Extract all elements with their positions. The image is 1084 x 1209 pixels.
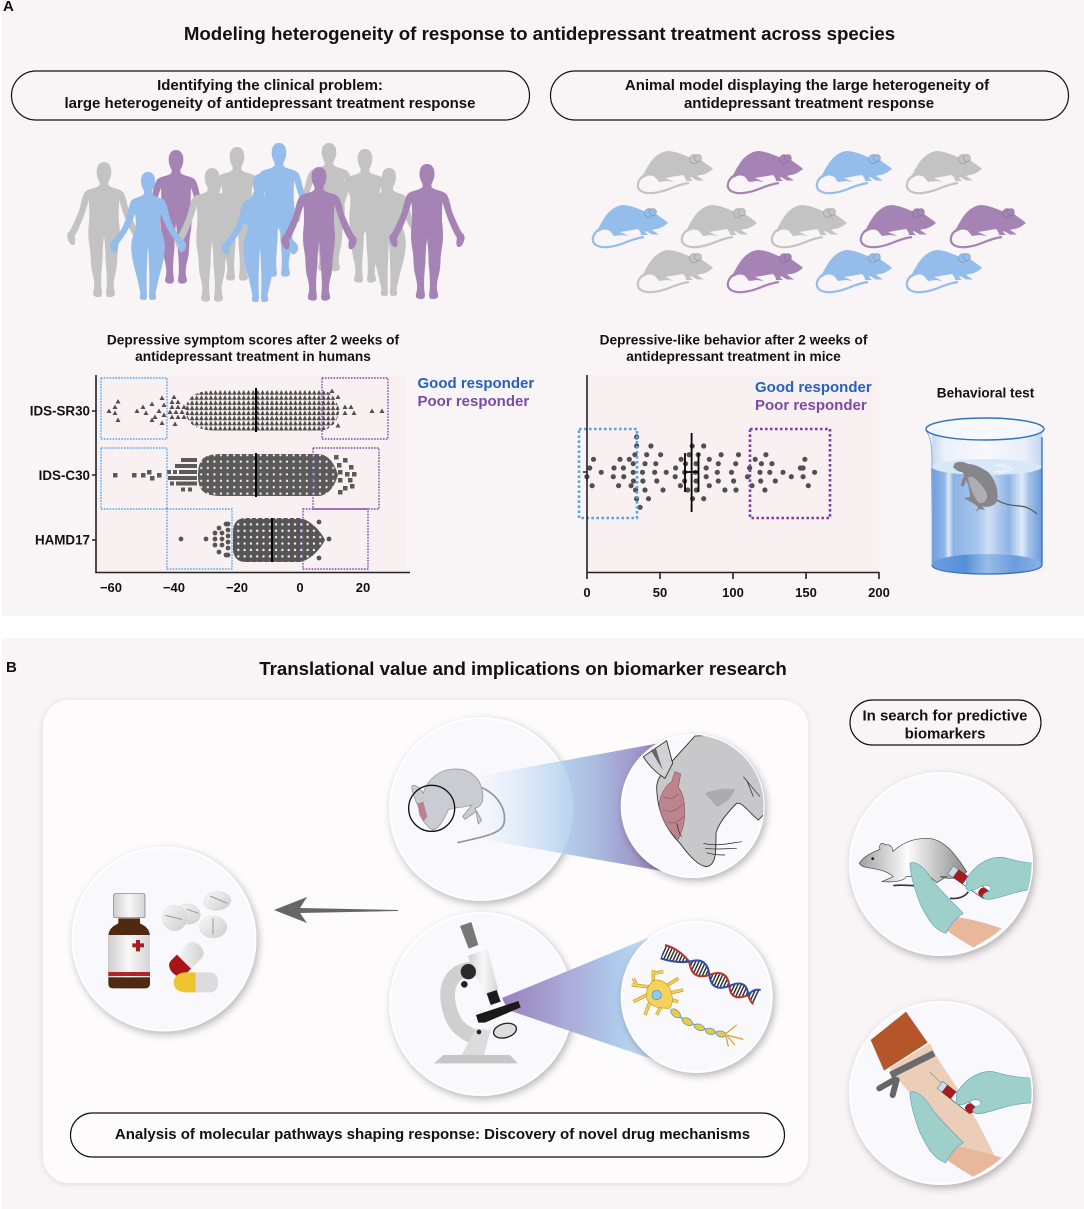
circle: microscope <box>390 913 572 1095</box>
pill: animal model: Animal model displaying the large heterogeneity of <box>625 77 990 94</box>
poor responder box <box>750 429 830 518</box>
poor responder boxes <box>303 378 388 569</box>
swarm IDS-SR30 <box>106 388 384 433</box>
icon: neuron <box>632 970 743 1047</box>
heading: behavioral test: Behavioral test <box>937 386 1035 400</box>
row labels: IDS-C30 <box>39 468 90 483</box>
chart: human swarm plot <box>30 375 410 595</box>
legend: mouse chart: Poor responder <box>755 397 867 414</box>
legend: mouse chart <box>755 379 872 414</box>
main title panel B: Translational value and implications on biomarker research <box>259 658 787 679</box>
icon: microscope <box>434 922 521 1063</box>
pill: predictive biomarkers <box>850 700 1041 745</box>
circle: drugs <box>72 848 256 1030</box>
legend: human chart <box>418 375 534 410</box>
x axis labels: −40 <box>163 580 185 595</box>
x axis labels: 150 <box>795 585 817 600</box>
chart: mouse swarm plot <box>579 375 890 600</box>
pill: animal model: antidepressant treatment response <box>684 95 934 112</box>
x axis labels <box>100 580 370 595</box>
pill: predictive biomarkers: biomarkers <box>905 726 985 742</box>
heading: mouse chart: Depressive-like behavior after 2 weeks of <box>600 332 868 348</box>
swarm IDS-C30 <box>113 452 356 498</box>
dots <box>587 437 815 507</box>
circle: mouse blood sampling <box>850 773 1047 955</box>
circle: mouse whole body <box>390 718 572 900</box>
x axis labels: 0 <box>296 580 304 595</box>
circle: human blood sampling <box>850 1002 1037 1184</box>
x axis labels: −20 <box>226 580 248 595</box>
panel: translational white card <box>43 700 808 1183</box>
legend: human chart: Poor responder <box>418 393 529 410</box>
good responder boxes <box>101 378 232 569</box>
legend: mouse chart: Good responder <box>755 379 872 396</box>
circle sheen over beam <box>480 762 573 854</box>
pill: clinical problem <box>12 71 530 120</box>
panel B background <box>2 638 1084 1209</box>
row labels: HAMD17 <box>35 532 90 548</box>
icon: DNA helix <box>661 945 761 1004</box>
panel A background <box>2 0 1084 616</box>
x axis labels <box>583 585 890 600</box>
x axis labels: 200 <box>868 585 890 600</box>
beam: microscope zoom <box>502 938 655 1060</box>
swimming mouse <box>997 500 1037 514</box>
pill: molecular pathways <box>70 1113 784 1157</box>
main title panel A: Modeling heterogeneity of response to antidepressant treatment across species <box>184 23 895 44</box>
heading: mouse chart <box>600 332 868 364</box>
mean and error bars <box>685 433 698 512</box>
x axis labels: 50 <box>653 585 667 600</box>
beam: mouse zoom <box>480 743 662 871</box>
heading: human chart: antidepressant treatment in humans <box>135 349 371 364</box>
heading: human chart <box>107 332 400 364</box>
mean lines <box>256 388 272 562</box>
icon: beaker with swimming mouse <box>926 418 1044 574</box>
pill: animal model <box>550 71 1068 120</box>
legend: human chart: Good responder <box>418 375 534 392</box>
pill: molecular pathways: Analysis of molecular pathways shaping response: Discovery of novel drug mechanisms <box>115 1126 750 1143</box>
axes <box>92 375 410 572</box>
pill: clinical problem: Identifying the clinical problem: <box>157 77 383 94</box>
x axis labels: 0 <box>583 585 591 600</box>
circle: neuron and DNA <box>622 922 772 1072</box>
swarm HAMD17 <box>181 516 329 564</box>
icon: mouse in circle <box>409 769 504 843</box>
icon: medicine bottle and pills <box>108 891 232 992</box>
row labels: IDS-SR30 <box>30 404 90 418</box>
row labels <box>30 404 90 548</box>
good responder box <box>579 429 637 518</box>
axes <box>583 375 879 579</box>
circle: mouse brain zoom <box>622 733 767 877</box>
pill: predictive biomarkers: In search for predictive <box>862 708 1028 724</box>
mouse silhouettes <box>593 151 1026 292</box>
panel B label: B <box>6 659 17 676</box>
pill: clinical problem: large heterogeneity of antidepressant treatment response <box>65 95 475 112</box>
x axis labels: 100 <box>722 585 744 600</box>
heading: human chart: Depressive symptom scores after 2 weeks of <box>107 332 400 348</box>
human silhouettes <box>67 143 465 302</box>
x axis labels: 20 <box>356 580 370 595</box>
arrow: toward drugs <box>274 897 398 923</box>
x axis labels: −60 <box>100 580 122 595</box>
heading: mouse chart: antidepressant treatment in mice <box>626 349 841 364</box>
